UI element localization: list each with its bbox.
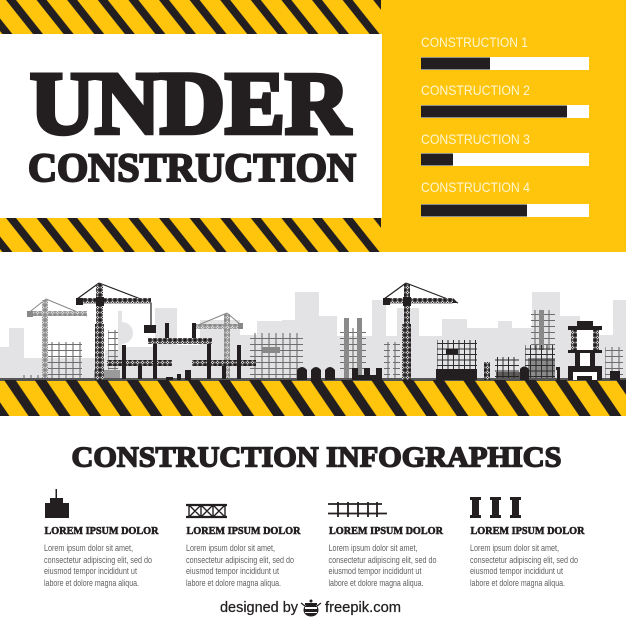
- footer credit: freepik.com: [325, 600, 401, 616]
- column 3: consectetur adipiscing elit, sed do: [328, 555, 437, 565]
- black crane left: [76, 283, 156, 380]
- column 4: labore et dolore magna aliqua.: [470, 578, 565, 588]
- column 1: eiusmod tempor incididunt ut: [44, 566, 137, 576]
- column 3: LOREM IPSUM DOLOR: [329, 526, 444, 537]
- gray crane left: [27, 299, 87, 380]
- icon: fence: [328, 502, 387, 517]
- column 4: consectetur adipiscing elit, sed do: [470, 555, 578, 565]
- icon: freepik logo: [301, 600, 321, 616]
- column 3: [328, 502, 444, 588]
- column 2: LOREM IPSUM DOLOR: [186, 526, 301, 537]
- gray crane right: [196, 313, 243, 380]
- bar: construction 2: [421, 82, 589, 118]
- column 1: [44, 489, 159, 588]
- column 4: LOREM IPSUM DOLOR: [470, 526, 585, 537]
- bar: construction 1: [421, 34, 589, 70]
- column 1: consectetur adipiscing elit, sed do: [44, 555, 152, 565]
- black building under construction: [436, 340, 620, 380]
- column 3: Lorem ipsum dolor sit amet,: [328, 543, 418, 553]
- column 3: eiusmod tempor incididunt ut: [328, 566, 422, 576]
- bar: construction 3: [421, 131, 589, 166]
- black tower: [568, 321, 602, 380]
- heading: CONSTRUCTION: CONSTRUCTION: [28, 145, 356, 190]
- column 2: [186, 505, 301, 588]
- progress bars panel: [421, 34, 589, 217]
- ground line: [0, 378, 626, 381]
- city silhouette: [0, 292, 626, 378]
- domes and blocks: [297, 367, 382, 380]
- bar: construction 2: CONSTRUCTION 2: [421, 82, 530, 98]
- footer credit: [220, 600, 401, 616]
- panel: title box: [0, 34, 382, 218]
- heading: UNDER: UNDER: [30, 55, 352, 153]
- column 3: labore et dolore magna aliqua.: [328, 578, 424, 588]
- column 1: Lorem ipsum dolor sit amet,: [44, 543, 133, 553]
- black crane right: [383, 283, 458, 380]
- column 2: Lorem ipsum dolor sit amet,: [186, 543, 275, 553]
- top hazard stripe: [0, 0, 382, 34]
- column 4: Lorem ipsum dolor sit amet,: [470, 543, 559, 553]
- footer credit: designed by: [220, 600, 299, 616]
- bar: construction 4: CONSTRUCTION 4: [421, 179, 530, 195]
- bottom hazard stripe: [0, 218, 382, 252]
- column 1: labore et dolore magna aliqua.: [44, 578, 139, 588]
- icon: three pillars: [470, 497, 521, 518]
- black steel frame: [107, 323, 256, 380]
- middle hazard stripe: [0, 380, 626, 416]
- scaffolds gray: [22, 310, 623, 379]
- column 2: labore et dolore magna aliqua.: [186, 578, 281, 588]
- column 4: [470, 497, 585, 588]
- column 4: eiusmod tempor incididunt ut: [470, 566, 563, 576]
- icon: truss: [186, 505, 227, 517]
- panel: yellow sidebar: [382, 0, 626, 252]
- icon: building block: [45, 489, 69, 518]
- bar: construction 4: [421, 179, 589, 217]
- column 2: eiusmod tempor incididunt ut: [186, 566, 279, 576]
- column 2: consectetur adipiscing elit, sed do: [186, 555, 294, 565]
- bar: construction 1: CONSTRUCTION 1: [421, 34, 528, 50]
- column 1: LOREM IPSUM DOLOR: [44, 526, 159, 537]
- illustration: construction skyline: [0, 283, 626, 381]
- heading: construction infographics: CONSTRUCTION INFOGRAPHICS: [72, 442, 562, 473]
- bar: construction 3: CONSTRUCTION 3: [421, 131, 530, 147]
